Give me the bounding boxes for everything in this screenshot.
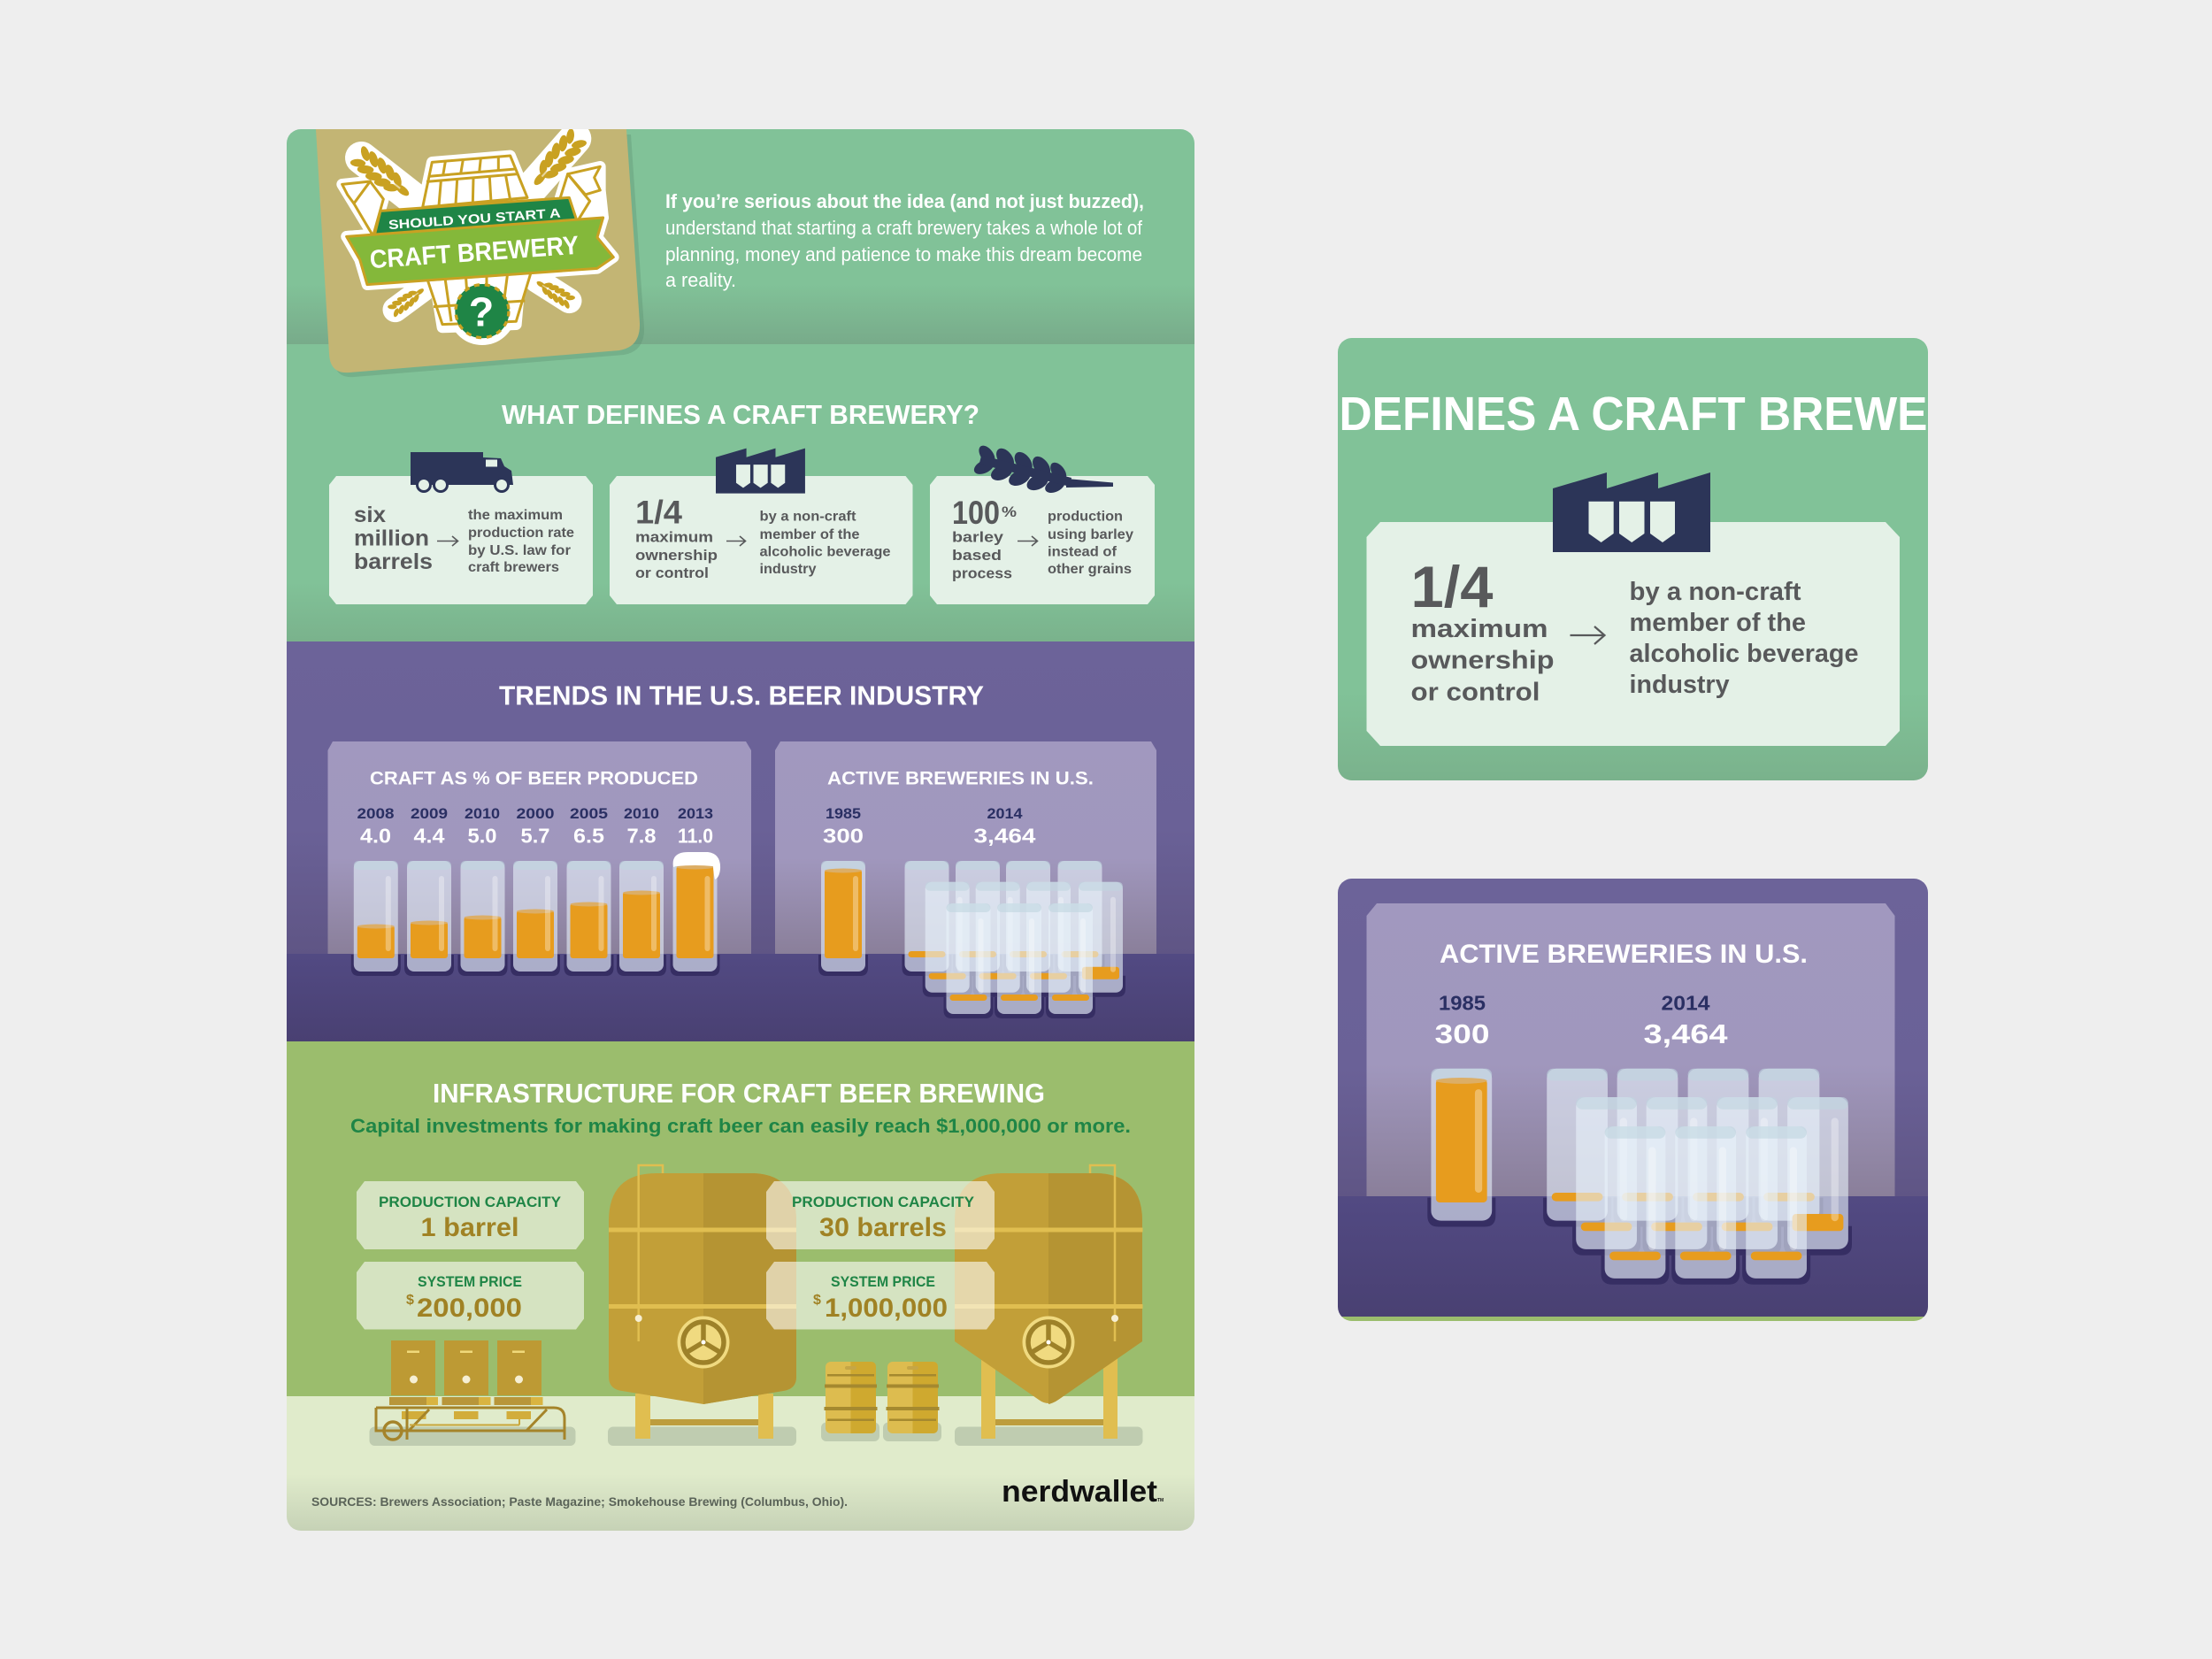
light green ribbon: [347, 218, 613, 285]
value labels: 3,464: [973, 825, 1036, 848]
card: six million barrels: six: [354, 503, 386, 527]
sources: SOURCES: Brewers Association; Paste Magazine; Smokehouse Brewing (Columbus, Ohio).: [311, 1495, 848, 1509]
inset description: alcoholic beverage: [1630, 640, 1858, 668]
inset arrow: [1570, 626, 1605, 644]
box: system price 1,000,000: SYSTEM PRICE: [831, 1273, 935, 1290]
barrel: [423, 156, 531, 325]
value labels: 4.0: [360, 825, 391, 848]
logo badge: [342, 124, 613, 340]
section background: header: [287, 129, 1194, 344]
nerdwallet logo: nerdwallet: [1002, 1475, 1157, 1509]
box: production capacity 30 barrels: PRODUCTION CAPACITY: [792, 1194, 975, 1210]
inset fraction text: [1410, 554, 1554, 706]
card: 100% barley: instead of: [1048, 545, 1118, 559]
inset glasses 2014: [1543, 1069, 1852, 1285]
tank wheel: [1023, 1317, 1074, 1368]
card: six million barrels: [329, 476, 593, 604]
box: system price 1,000,000: [766, 1262, 995, 1329]
card: one quarter ownership: 1/4: [635, 494, 682, 531]
value labels: 5.0: [467, 825, 497, 848]
box: system price 200,000: $: [406, 1293, 414, 1308]
chart: craft share glasses: [351, 852, 720, 976]
nerdwallet logo: TM: [1157, 1498, 1164, 1503]
year labels: 2000: [517, 806, 554, 822]
tank: thirty barrel system: [955, 1165, 1143, 1446]
panel: craft as percent: [327, 741, 751, 954]
card: 100% barley: [930, 476, 1155, 604]
card: one quarter ownership: ownership: [635, 547, 718, 564]
card: six million barrels: barrels: [354, 549, 433, 574]
dark green ribbon: SHOULD YOU START A: [388, 207, 562, 233]
year labels: 2010: [465, 806, 500, 822]
gear with question mark: ?: [469, 289, 494, 335]
card: 100% barley: using barley: [1048, 527, 1133, 542]
inset years: 2014: [1662, 991, 1710, 1014]
box: production capacity 1 barrel: [357, 1181, 584, 1249]
inset years: [1439, 991, 1710, 1014]
value labels: 6.5: [573, 825, 604, 848]
inset years: 1985: [1439, 991, 1486, 1014]
section background: infrastructure: [287, 1041, 1194, 1396]
inset card: [1366, 522, 1900, 746]
year labels: 2013: [678, 806, 713, 822]
inset fraction text: 1/4: [1410, 554, 1494, 619]
inset values: 300: [1435, 1018, 1490, 1049]
intro text: If you’re serious about the idea (and not just buzzed),: [665, 190, 1144, 212]
inset fraction text: ownership: [1410, 646, 1554, 674]
box: system price 1,000,000: 1,000,000: [825, 1294, 948, 1323]
infographic canvas: [287, 129, 1928, 1531]
card: six million barrels: the maximum: [468, 508, 563, 523]
dark green ribbon: [374, 197, 578, 237]
inset fraction text: or control: [1410, 678, 1540, 706]
value labels: 5.7: [520, 825, 550, 848]
main infographic: [287, 124, 1194, 1531]
card: 100% barley: other grains: [1048, 562, 1132, 577]
intro text: a reality.: [665, 269, 736, 291]
inset heading: ACTIVE BREWERIES IN U.S.: [1440, 940, 1808, 969]
inset fraction text: maximum: [1410, 615, 1548, 643]
card: six million barrels: craft brewers: [468, 560, 559, 575]
icon: barley: [973, 446, 1113, 493]
card: 100% barley: 100: [952, 495, 1000, 531]
tank wheel: [678, 1317, 729, 1368]
inset factory icon: [1553, 472, 1710, 552]
value labels: 300: [823, 825, 864, 848]
box: system price 200,000: SYSTEM PRICE: [418, 1273, 522, 1290]
card: 100% barley: barley: [952, 529, 1004, 545]
box: production capacity 1 barrel: 1 barrel: [421, 1213, 518, 1242]
box: production capacity 30 barrels: [766, 1181, 995, 1249]
year labels: [357, 809, 1023, 818]
card: 100% barley: production: [1048, 510, 1123, 524]
year labels: 2008: [357, 806, 395, 822]
card: six million barrels: production rate: [468, 526, 574, 541]
icon: truck: [411, 452, 513, 493]
card: six million barrels: million: [354, 526, 429, 550]
box: production capacity 30 barrels: 30 barrels: [819, 1213, 947, 1242]
inset panel: active breweries detail: [1338, 879, 1928, 1321]
section background: trends table: [287, 954, 1194, 1041]
inset description: [1630, 578, 1858, 699]
card: one quarter ownership: industry: [759, 562, 817, 577]
section background: what defines: [287, 344, 1194, 641]
year labels: 2005: [570, 806, 608, 822]
card: one quarter ownership: [610, 476, 913, 604]
card: six million barrels: by U.S. law for: [468, 543, 571, 558]
inset heading: DEFINES A CRAFT BREWE: [1340, 388, 1927, 441]
logo white backing: [342, 139, 613, 340]
card: 100% barley: based: [952, 547, 1002, 564]
inset description: member of the: [1630, 609, 1806, 637]
light green ribbon: CRAFT BREWERY: [369, 231, 580, 274]
panel: craft as percent: CRAFT AS % OF BEER PRODUCED: [370, 768, 698, 789]
year labels: 2014: [987, 806, 1023, 822]
card: one quarter ownership: by a non-craft: [759, 510, 856, 524]
chart: brewery glass 1985: [818, 861, 868, 976]
inset values: 3,464: [1644, 1018, 1728, 1049]
card: one quarter ownership: maximum: [635, 529, 713, 545]
value labels: 4.4: [414, 825, 445, 848]
year labels: 2009: [411, 806, 448, 822]
box: production capacity 1 barrel: PRODUCTION CAPACITY: [379, 1194, 562, 1210]
tan title card: [316, 129, 640, 373]
value labels: 7.8: [626, 825, 657, 848]
one barrel trolley system: [370, 1340, 575, 1446]
gear with question mark: [455, 284, 510, 338]
kegs: [821, 1362, 941, 1441]
heading: infrastructure: INFRASTRUCTURE FOR CRAFT BEER BREWING: [433, 1079, 1045, 1109]
inset wall panel: [1366, 903, 1895, 1196]
heading: what defines a craft brewery: WHAT DEFINES A CRAFT BREWERY?: [502, 400, 979, 430]
value labels: [360, 828, 1035, 846]
inset glass 1985: [1427, 1069, 1495, 1226]
box: system price 1,000,000: $: [813, 1293, 821, 1308]
year labels: 1985: [826, 806, 861, 822]
year labels: 2010: [624, 806, 659, 822]
value labels: 11.0: [678, 825, 713, 848]
chart: brewery glasses 2014: [902, 861, 1125, 1018]
icon: factory: [716, 449, 805, 494]
card: one quarter ownership: alcoholic beverage: [759, 545, 891, 559]
inset values: [1435, 1018, 1728, 1049]
card: 100% barley: %: [1002, 503, 1017, 520]
subheading: capital investments: Capital investments for making craft beer can easily reach $1,000,000 or more.: [350, 1115, 1131, 1137]
panel: active breweries: ACTIVE BREWERIES IN U.S.: [827, 768, 1094, 789]
inset description: by a non-craft: [1630, 578, 1801, 606]
box: system price 200,000: [357, 1262, 584, 1329]
section background: floor: [287, 1396, 1194, 1531]
section background: trends wall: [287, 641, 1194, 954]
inset description: industry: [1630, 671, 1729, 699]
heading: trends: TRENDS IN THE U.S. BEER INDUSTRY: [499, 681, 984, 711]
card: one quarter ownership: member of the: [759, 527, 860, 542]
ribbon tails: [342, 166, 600, 236]
card: 100% barley: process: [952, 565, 1012, 582]
card: one quarter ownership: or control: [635, 565, 709, 581]
intro text: [665, 190, 1144, 291]
inset panel: one quarter detail: [1338, 338, 1928, 780]
intro text: planning, money and patience to make this dream become: [665, 243, 1142, 265]
tank: one barrel system: [608, 1165, 796, 1446]
tan title card shadow: [320, 134, 644, 377]
wheat ears: [346, 124, 591, 320]
intro text: understand that starting a craft brewery takes a whole lot of: [665, 217, 1143, 239]
panel: active breweries: [775, 741, 1156, 954]
box: system price 200,000: 200,000: [417, 1294, 522, 1323]
